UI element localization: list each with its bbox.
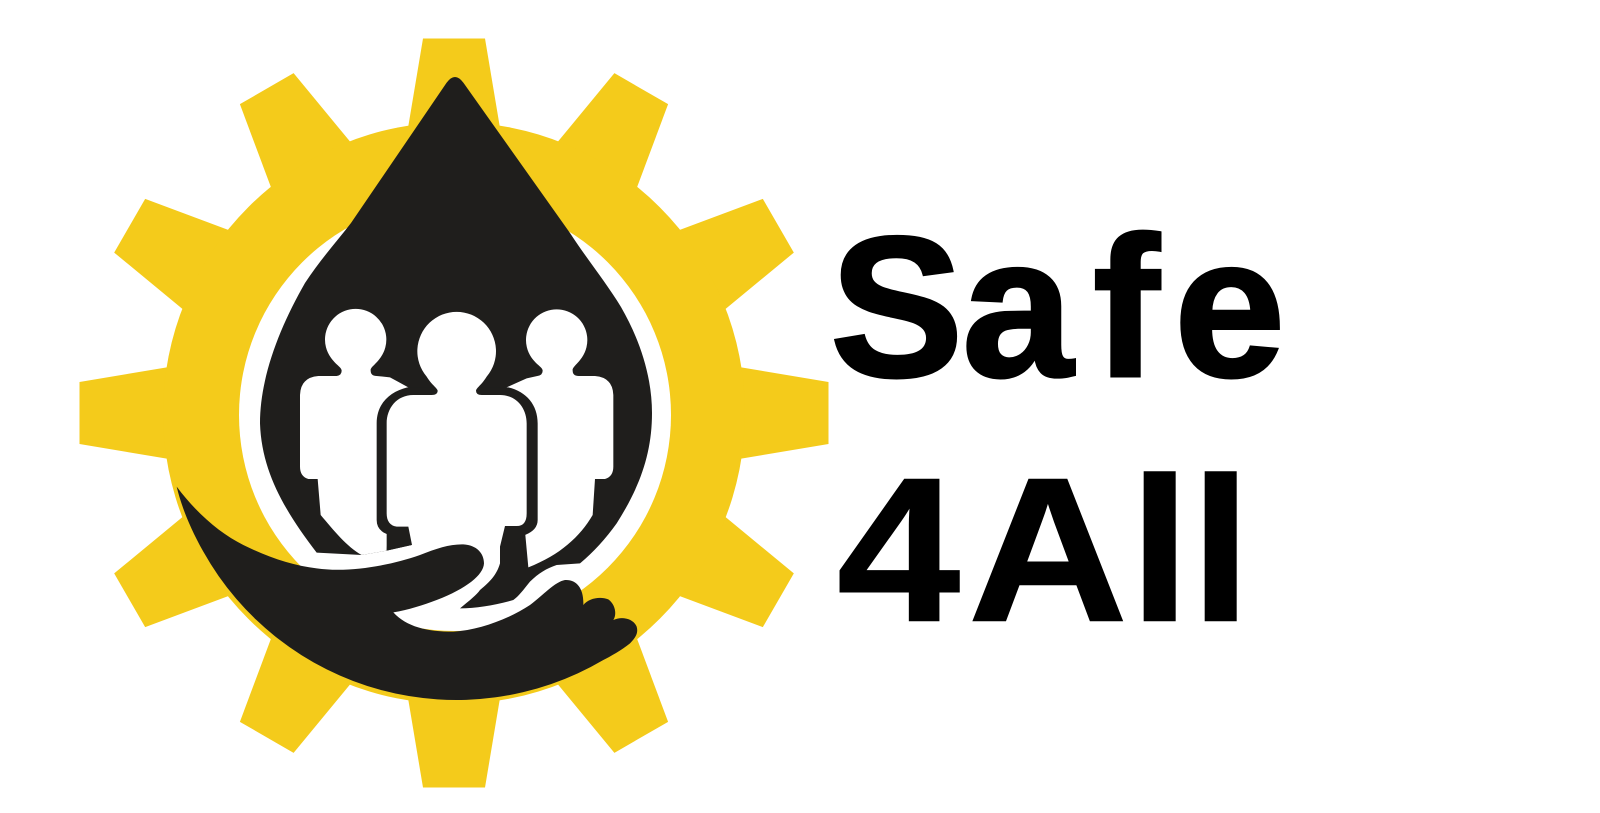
icon: right person [507, 309, 613, 567]
icon: yellow gear [80, 38, 829, 788]
icon: supporting hand [177, 487, 637, 700]
icon: black oil drop [260, 77, 652, 608]
icon: centre person [387, 312, 527, 552]
title: Safe: Safe [830, 196, 1285, 419]
title: 4All: 4All [837, 436, 1252, 665]
icon: drop, people and hand [177, 77, 652, 700]
icon: left person [300, 309, 408, 555]
icon: outline around centre person [377, 387, 538, 551]
